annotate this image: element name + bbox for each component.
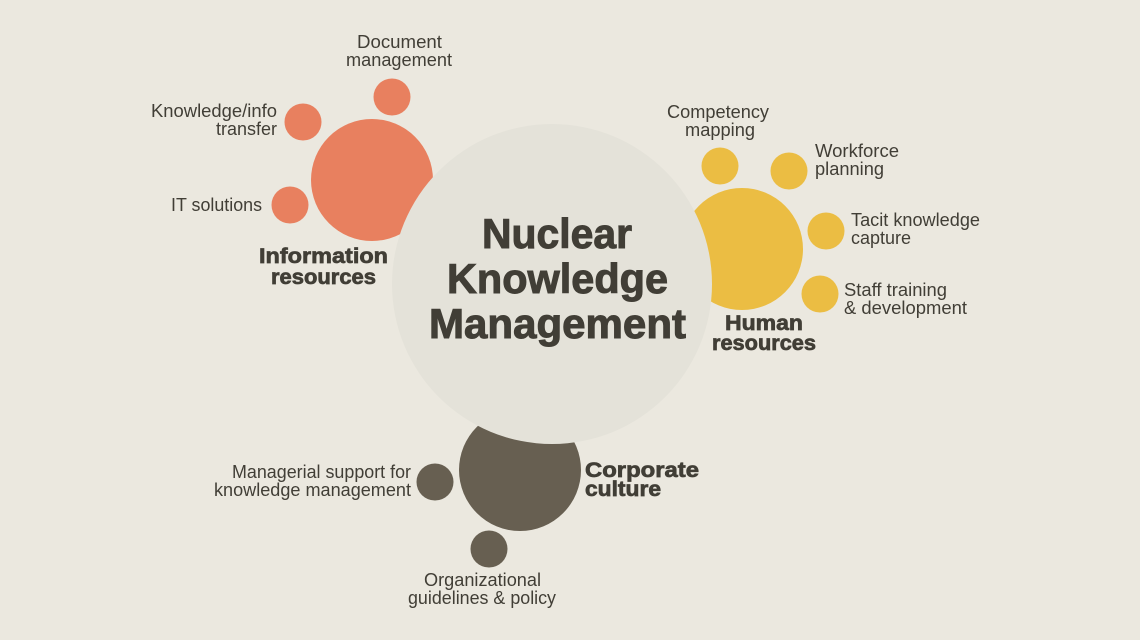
panel: corporate culture cluster (416, 409, 581, 568)
label: knowledge transfer: Knowledge/info (151, 100, 277, 121)
label: workforce planning: Workforce (815, 140, 899, 161)
icon: tacit knowledge circle (808, 212, 844, 250)
icon: information resources large circle (311, 119, 433, 241)
title (429, 210, 686, 347)
heading: human resources (712, 312, 816, 355)
label: document management: management (346, 49, 452, 70)
icon: managerial support circle (416, 464, 454, 500)
label: document management: Document (357, 31, 442, 52)
label: knowledge transfer (151, 100, 277, 139)
label: competency mapping: mapping (685, 119, 755, 140)
heading: human resources: Human (725, 312, 803, 335)
label: staff training: & development (844, 297, 967, 318)
icon: staff training circle (802, 276, 838, 312)
icon: knowledge transfer circle (284, 104, 322, 140)
heading: human resources: resources (712, 332, 816, 355)
heading: information resources (259, 245, 388, 289)
label: competency mapping (667, 101, 770, 140)
icon: workforce planning circle (770, 152, 808, 190)
icon: document management circle (374, 78, 410, 116)
icon: IT solutions circle (272, 186, 308, 224)
icon: competency mapping circle (702, 148, 738, 184)
label: organizational guidelines: Organizational (424, 569, 541, 590)
icon: human resources large circle (681, 188, 803, 310)
heading: corporate culture: Corporate (585, 459, 699, 482)
label: competency mapping: Competency (667, 101, 770, 122)
icon: organizational guidelines circle (470, 530, 508, 568)
title: Knowledge (447, 255, 668, 302)
label: staff training (844, 279, 967, 318)
panel: information resources cluster (272, 78, 433, 241)
label: tacit knowledge capture: Tacit knowledge (851, 209, 980, 230)
icon: corporate culture large circle (459, 409, 581, 531)
label: managerial support: knowledge management (214, 479, 411, 500)
label: managerial support: Managerial support for (232, 461, 411, 482)
title: Nuclear (482, 210, 632, 257)
label: tacit knowledge capture: capture (851, 227, 911, 248)
heading: corporate culture: culture (585, 478, 661, 501)
title: Management (429, 300, 686, 347)
label: tacit knowledge capture (851, 209, 980, 248)
label: IT solutions: IT solutions (171, 194, 262, 215)
label: organizational guidelines: guidelines & policy (408, 587, 557, 608)
label: organizational guidelines (408, 569, 557, 608)
heading: information resources: resources (271, 266, 376, 289)
label: knowledge transfer: transfer (216, 118, 277, 139)
panel: human resources cluster (681, 148, 844, 312)
heading: information resources: Information (259, 245, 388, 268)
heading: corporate culture (585, 459, 699, 501)
label: workforce planning: planning (815, 158, 884, 179)
label: workforce planning (815, 140, 899, 179)
label: staff training: Staff training (844, 279, 947, 300)
label: managerial support (214, 461, 411, 500)
panel: central circle (392, 124, 712, 444)
label: document management (346, 31, 452, 70)
